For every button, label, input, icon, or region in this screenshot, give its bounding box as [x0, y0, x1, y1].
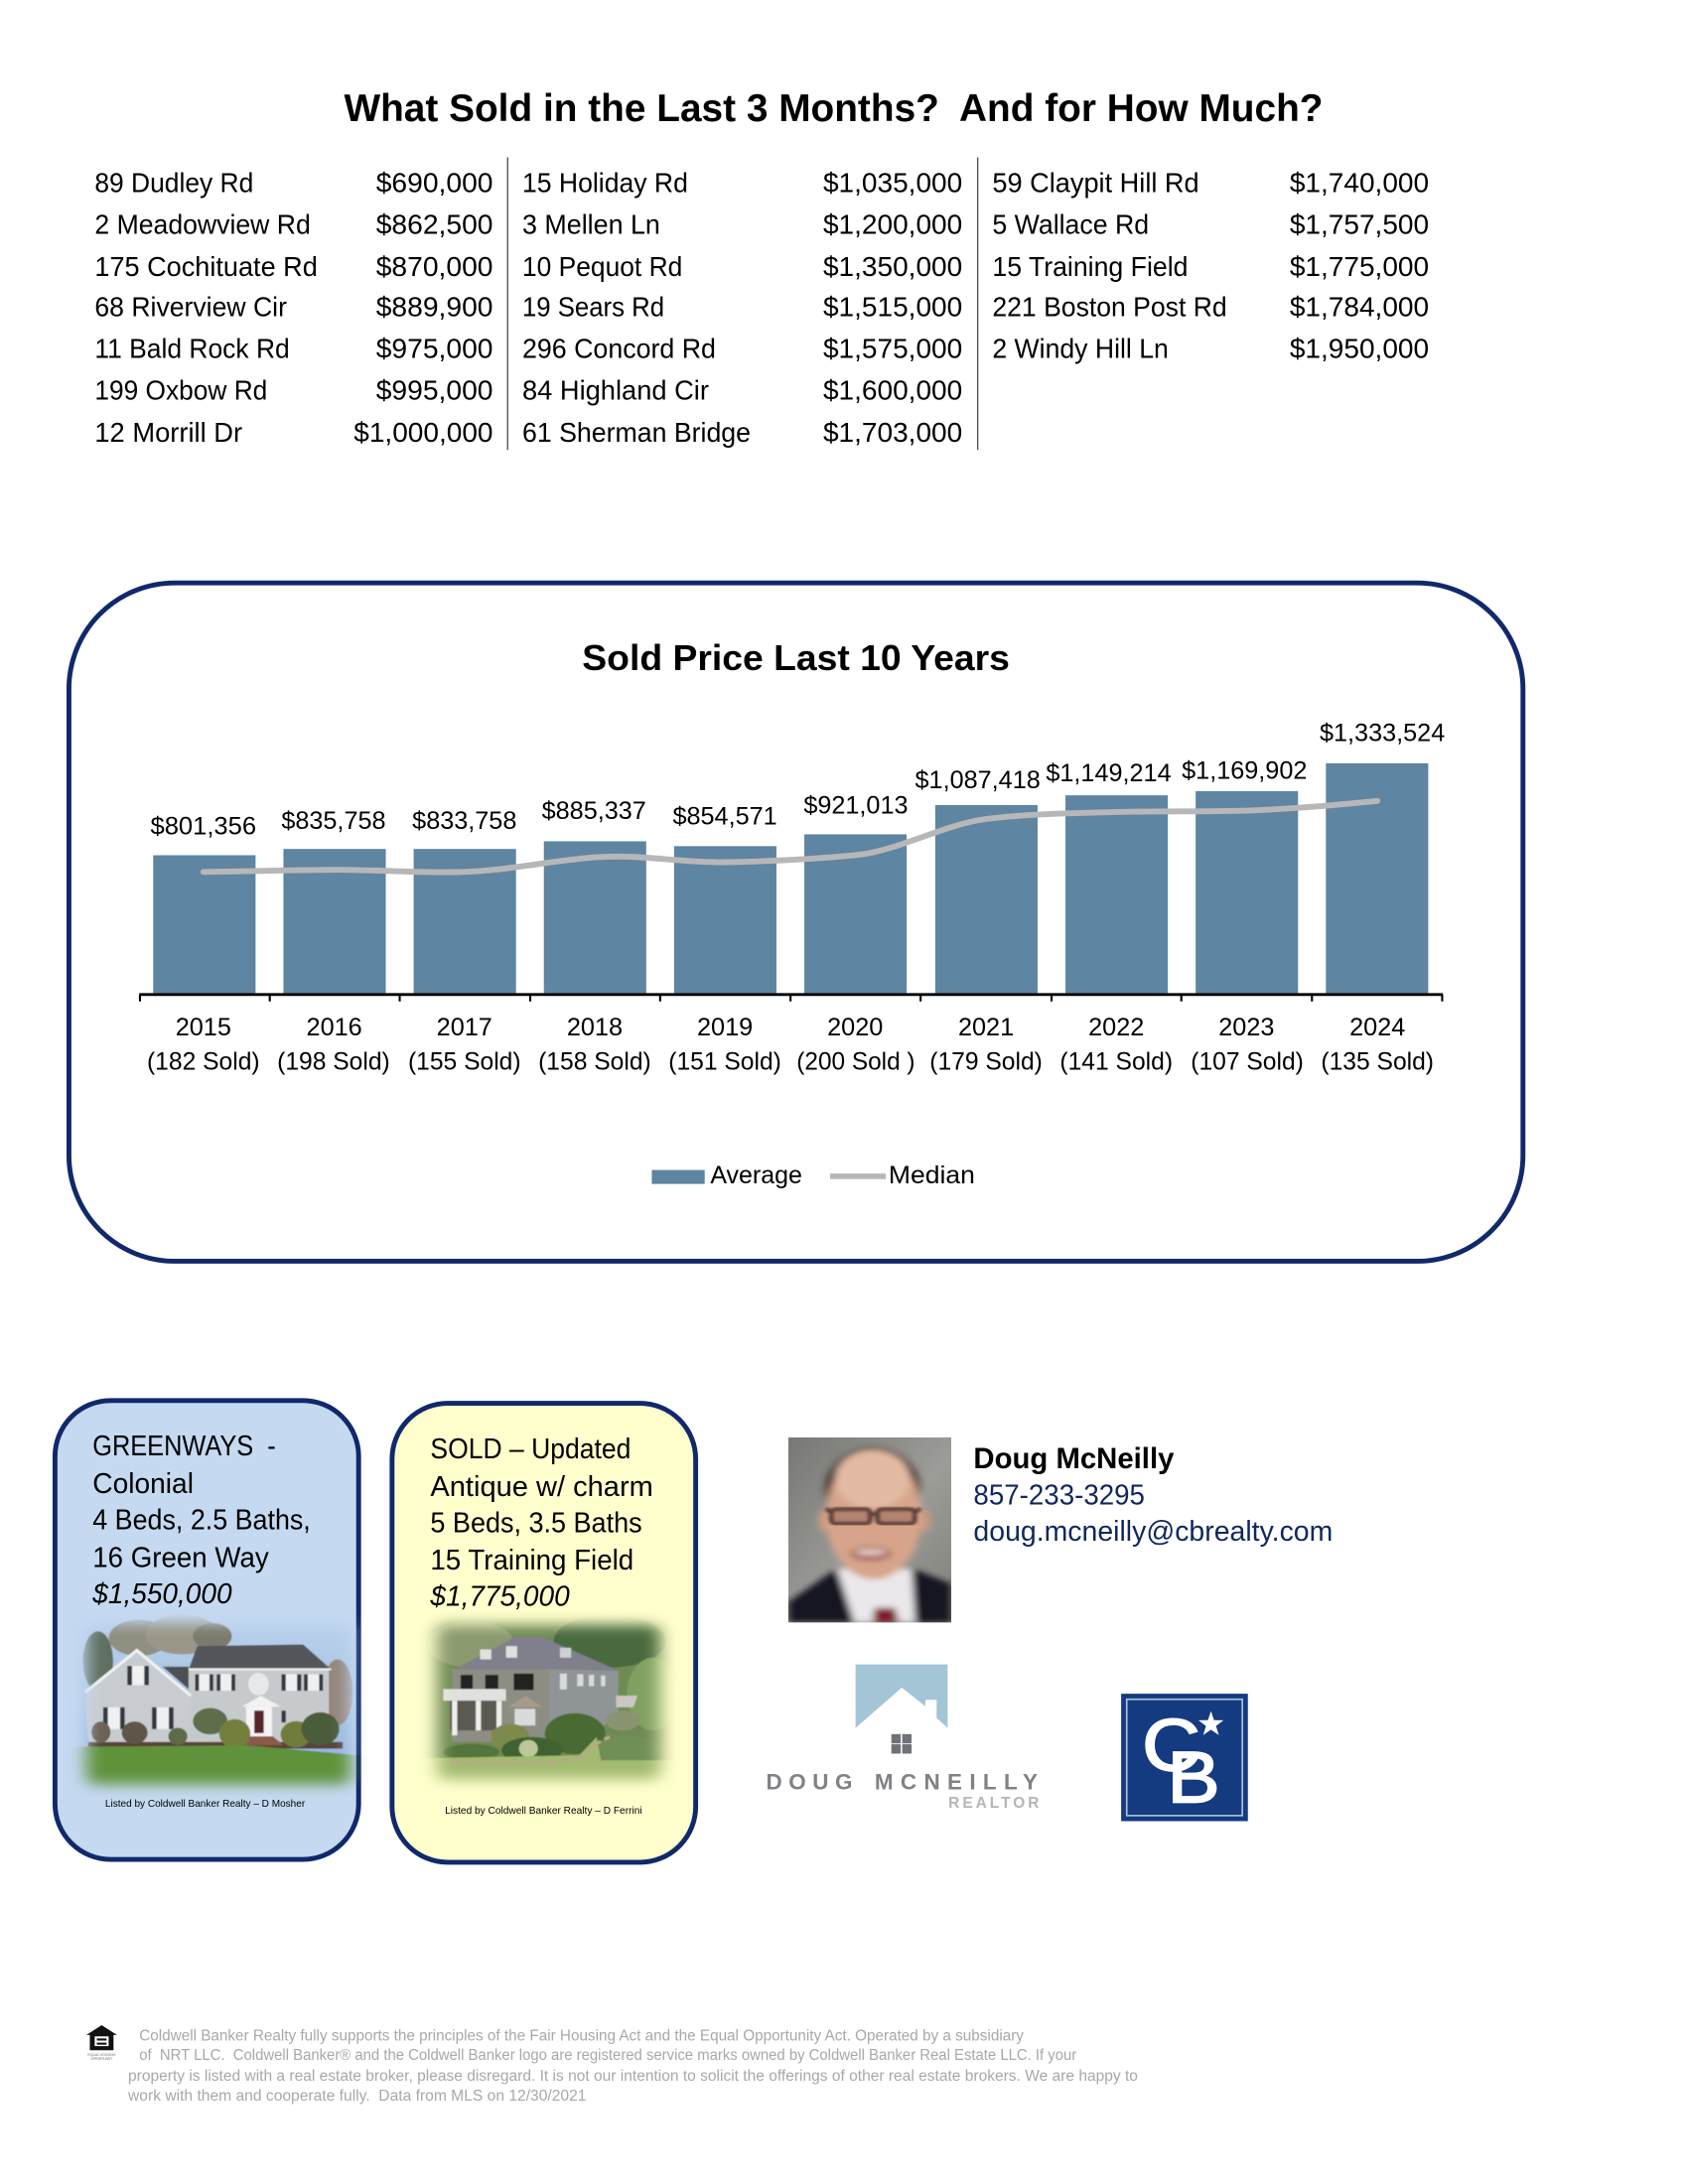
- column 3 addresses and prices: [992, 168, 1429, 364]
- axis sold counts: (155 Sold): [408, 1048, 521, 1076]
- data labels: $801,356: [150, 812, 256, 840]
- column 3 addresses and prices: 221 Boston Post Rd: [992, 291, 1227, 322]
- column 2 addresses and prices: 84 Highland Cir: [522, 375, 709, 406]
- logo: Coldwell Banker: C: [1142, 1704, 1200, 1786]
- listing details: 5 Beds, 3.5 Baths: [430, 1507, 642, 1539]
- legend: [651, 1161, 975, 1189]
- column 2 addresses and prices: [522, 168, 962, 448]
- axis year labels: 2018: [567, 1014, 623, 1041]
- listing details: GREENWAYS -: [92, 1431, 276, 1462]
- column 1 addresses and prices: 68 Riverview Cir: [94, 291, 287, 322]
- logo: Doug McNeilly Realtor: [766, 1665, 1039, 1812]
- listing details: $1,775,000: [429, 1581, 570, 1613]
- column 1 addresses and prices: 2 Meadowview Rd: [94, 209, 311, 240]
- axis year labels: 2022: [1088, 1014, 1144, 1041]
- axis sold counts: [147, 1048, 1434, 1076]
- panel: Greenways listing card: [55, 1401, 385, 1859]
- logo: Doug McNeilly Realtor: MCNEILLY: [875, 1769, 1038, 1794]
- column 3 addresses and prices: 15 Training Field: [992, 251, 1188, 282]
- column 3 addresses and prices: $1,740,000: [1290, 168, 1429, 199]
- column 3 addresses and prices: 2 Windy Hill Ln: [992, 334, 1169, 364]
- listing details: [429, 1433, 653, 1613]
- listing details: Colonial: [92, 1468, 194, 1500]
- column 1 addresses and prices: 175 Cochituate Rd: [94, 251, 318, 282]
- photo: agent portrait: [788, 1437, 951, 1622]
- axis year labels: 2019: [697, 1014, 753, 1041]
- axis year labels: 2015: [176, 1014, 231, 1041]
- data labels: [150, 719, 1445, 840]
- listing details: 4 Beds, 2.5 Baths,: [92, 1505, 311, 1537]
- column 1 addresses and prices: 11 Bald Rock Rd: [94, 334, 290, 364]
- footer disclaimer: Coldwell Banker Realty fully supports the principles of the Fair Housing Act and the Equal Opportunity Act. Operated by a subsidiary: [139, 2027, 1024, 2044]
- panel: Sold listing card: [392, 1404, 696, 1862]
- data labels: $1,087,418: [915, 766, 1041, 794]
- x axis: [139, 995, 1443, 1002]
- bar chart: average price bars: [153, 763, 1428, 993]
- axis sold counts: (179 Sold): [929, 1048, 1043, 1076]
- listing agent caption: Listed by Coldwell Banker Realty – D Ferrini: [445, 1805, 642, 1817]
- axis sold counts: (158 Sold): [538, 1048, 651, 1076]
- column 1 addresses and prices: $995,000: [376, 375, 493, 406]
- column 2 addresses and prices: $1,200,000: [823, 209, 962, 240]
- column 1 addresses and prices: [94, 168, 493, 448]
- data labels: $833,758: [412, 807, 516, 835]
- column 1 addresses and prices: $862,500: [376, 209, 493, 240]
- axis year labels: [176, 1014, 1405, 1041]
- agent contact details: [973, 1442, 1333, 1548]
- icon: equal housing opportunity: [86, 2025, 117, 2061]
- column 1 addresses and prices: 199 Oxbow Rd: [94, 375, 267, 406]
- column 1 addresses and prices: $975,000: [376, 334, 493, 364]
- data labels: $1,333,524: [1320, 719, 1445, 747]
- column 1 addresses and prices: $1,000,000: [353, 417, 493, 448]
- data labels: $1,169,902: [1182, 756, 1307, 784]
- footer disclaimer: of NRT LLC. Coldwell Banker® and the Coldwell Banker logo are registered service marks owned by Coldwell Banker Real Estate LLC. If your: [139, 2047, 1076, 2064]
- data labels: $885,337: [542, 797, 646, 825]
- column 2 addresses and prices: 61 Sherman Bridge: [522, 417, 751, 448]
- column 3 addresses and prices: $1,784,000: [1290, 291, 1429, 322]
- column 2 addresses and prices: 10 Pequot Rd: [522, 251, 682, 282]
- column 3 addresses and prices: 59 Claypit Hill Rd: [992, 168, 1199, 199]
- title: What Sold in the Last 3 Months? And for How Much?: [344, 87, 1324, 130]
- listing agent caption: Listed by Coldwell Banker Realty – D Mosher: [105, 1798, 306, 1810]
- column 2 addresses and prices: 15 Holiday Rd: [522, 168, 688, 199]
- logo: Doug McNeilly Realtor: REALTOR: [948, 1795, 1039, 1812]
- listing details: SOLD – Updated: [430, 1433, 631, 1465]
- axis sold counts: (151 Sold): [668, 1048, 781, 1076]
- column 2 addresses and prices: $1,600,000: [823, 375, 962, 406]
- data labels: $1,149,214: [1046, 759, 1172, 787]
- data labels: $854,571: [672, 803, 777, 831]
- axis sold counts: (198 Sold): [277, 1048, 390, 1076]
- axis year labels: 2016: [307, 1014, 362, 1041]
- column 1 addresses and prices: 12 Morrill Dr: [94, 417, 242, 448]
- column 2 addresses and prices: $1,703,000: [823, 417, 962, 448]
- listing details: 16 Green Way: [92, 1542, 269, 1573]
- footer disclaimer: work with them and cooperate fully. Data from MLS on 12/30/2021: [127, 2088, 587, 2105]
- axis year labels: 2017: [437, 1014, 492, 1041]
- axis sold counts: (107 Sold): [1191, 1048, 1304, 1076]
- column 3 addresses and prices: $1,775,000: [1290, 251, 1429, 282]
- legend: Median: [889, 1161, 975, 1189]
- column 2 addresses and prices: 19 Sears Rd: [522, 291, 664, 322]
- axis year labels: 2021: [958, 1014, 1014, 1041]
- column 3 addresses and prices: 5 Wallace Rd: [992, 209, 1149, 240]
- data labels: $835,758: [281, 807, 386, 835]
- data labels: $921,013: [803, 791, 909, 819]
- column 2 addresses and prices: $1,350,000: [823, 251, 962, 282]
- logo: Doug McNeilly Realtor: DOUG: [766, 1769, 852, 1794]
- axis year labels: 2020: [827, 1014, 883, 1041]
- column 2 addresses and prices: 3 Mellen Ln: [522, 209, 660, 240]
- footer disclaimer: property is listed with a real estate broker, please disregard. It is not our intention to solicit the offerings of other real estate brokers. We are happy to: [128, 2068, 1138, 2085]
- column 2 addresses and prices: $1,515,000: [823, 291, 962, 322]
- panel: sold price chart: [69, 583, 1523, 1261]
- axis sold counts: (141 Sold): [1059, 1048, 1173, 1076]
- chart heading: Sold Price Last 10 Years: [582, 638, 1010, 678]
- column 1 addresses and prices: 89 Dudley Rd: [94, 168, 253, 199]
- axis sold counts: (182 Sold): [147, 1048, 260, 1076]
- photo: white colonial house: [72, 1615, 364, 1795]
- listing details: $1,550,000: [91, 1578, 232, 1610]
- listing details: Antique w/ charm: [430, 1471, 653, 1503]
- median line: [204, 801, 1377, 873]
- icon: equal housing opportunity: EQUAL HOUSING: [87, 2053, 116, 2057]
- axis year labels: 2024: [1349, 1014, 1405, 1041]
- column 3 addresses and prices: $1,757,500: [1290, 209, 1429, 240]
- footer disclaimer: [127, 2027, 1138, 2105]
- column 1 addresses and prices: $870,000: [376, 251, 493, 282]
- axis sold counts: (200 Sold ): [796, 1048, 915, 1076]
- legend: Average: [710, 1161, 802, 1189]
- panel: recent sales table: [94, 158, 1429, 450]
- column 2 addresses and prices: $1,575,000: [823, 334, 962, 364]
- agent contact details: Doug McNeilly: [973, 1442, 1175, 1475]
- agent contact details: 857-233-3295: [973, 1479, 1145, 1511]
- axis sold counts: (135 Sold): [1321, 1048, 1434, 1076]
- photo: grey shingled antique house: [424, 1614, 673, 1788]
- axis year labels: 2023: [1218, 1014, 1274, 1041]
- column 1 addresses and prices: $889,900: [376, 291, 493, 322]
- logo: Coldwell Banker: B: [1167, 1738, 1220, 1819]
- listing details: 15 Training Field: [430, 1545, 633, 1576]
- listing details: [91, 1431, 311, 1610]
- column 2 addresses and prices: 296 Concord Rd: [522, 334, 716, 364]
- logo: Coldwell Banker: [1121, 1694, 1248, 1822]
- agent contact details: doug.mcneilly@cbrealty.com: [973, 1516, 1333, 1548]
- icon: equal housing opportunity: OPPORTUNITY: [90, 2057, 113, 2061]
- column 1 addresses and prices: $690,000: [376, 168, 493, 199]
- column 2 addresses and prices: $1,035,000: [823, 168, 962, 199]
- column 3 addresses and prices: $1,950,000: [1290, 334, 1429, 364]
